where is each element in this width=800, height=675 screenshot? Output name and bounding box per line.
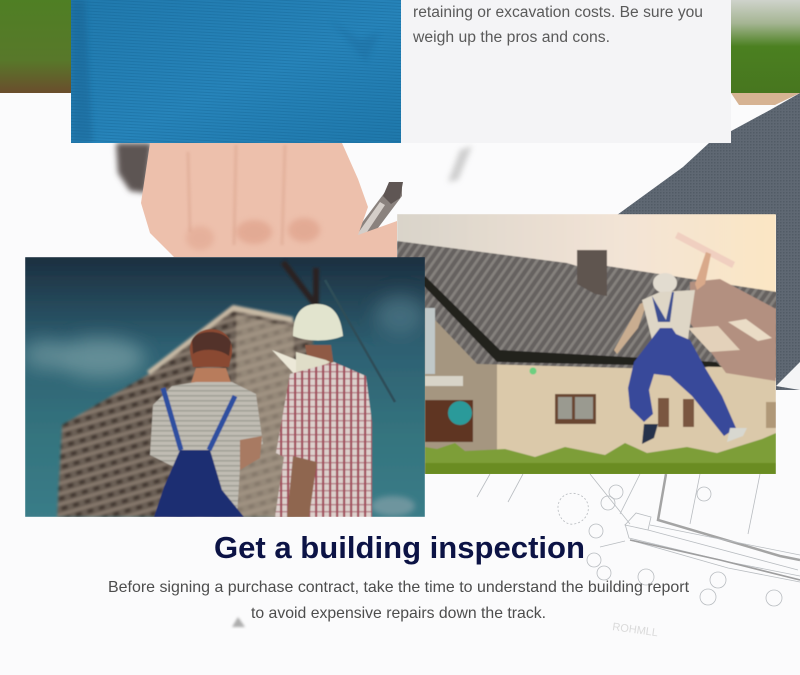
panel: blue shirt photo	[71, 0, 401, 143]
left wall	[424, 309, 498, 474]
man in overalls	[150, 329, 263, 517]
body text: Before signing a purchase contract, take the time to understand the building report	[108, 579, 690, 596]
eave	[420, 276, 722, 367]
background photo: hand with pencil and grey sleeve	[116, 93, 800, 390]
body text: to avoid expensive repairs down the track.	[251, 605, 546, 622]
background photo: blueprint: ROHMLL	[612, 621, 659, 639]
roof	[397, 241, 777, 378]
small triangle mark	[232, 617, 245, 627]
clouds	[55, 338, 145, 378]
photo: house and jumping worker	[397, 214, 777, 481]
panel: text card	[401, 0, 731, 143]
strip of grass photo, right	[731, 0, 800, 93]
watch	[116, 143, 152, 193]
man with helmet	[272, 304, 372, 517]
windows	[555, 394, 596, 424]
hand	[141, 143, 397, 257]
body text	[108, 579, 690, 622]
building	[57, 307, 313, 517]
lens flare	[448, 401, 472, 425]
photo: two workers and building	[23, 257, 425, 517]
worker	[614, 232, 747, 444]
skylights	[728, 319, 772, 341]
grass	[425, 432, 776, 474]
crane	[283, 262, 317, 308]
desk smudge	[448, 146, 472, 182]
card text	[412, 4, 703, 46]
front wall	[496, 364, 776, 458]
chimney	[577, 250, 607, 296]
strip of grass photo, left	[0, 0, 71, 93]
card text: weigh up the pros and cons.	[412, 29, 610, 46]
background photo: blueprint	[477, 474, 800, 639]
pencil	[352, 182, 402, 244]
sleeve	[617, 93, 800, 390]
card text: retaining or excavation costs. Be sure you	[413, 4, 703, 21]
heading: Get a building inspection	[214, 530, 585, 565]
